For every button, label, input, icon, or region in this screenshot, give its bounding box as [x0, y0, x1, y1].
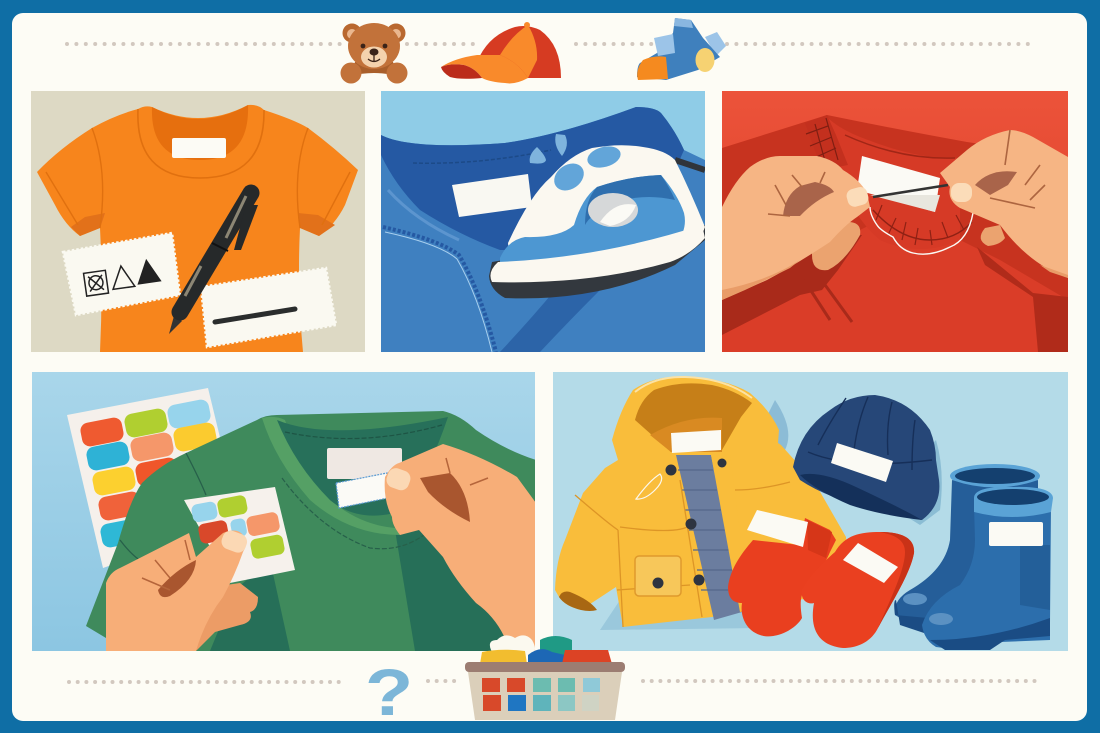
- panel: iron-on label: [381, 91, 705, 352]
- left hand: [722, 156, 870, 300]
- steam iron: [489, 143, 705, 298]
- orange t-shirt: [37, 105, 358, 352]
- yellow coat: [555, 377, 850, 630]
- icon: teddy bear: [340, 23, 408, 84]
- steam drops: [530, 134, 567, 164]
- right hand: [384, 444, 536, 651]
- hood label: [671, 430, 721, 453]
- blue jacket: [381, 107, 705, 352]
- left hand: [106, 528, 258, 651]
- panel: stick-on labels: [32, 372, 536, 651]
- panel: winter clothes with labels: [553, 372, 1068, 651]
- bottom dotted rule: [69, 681, 1036, 682]
- iron-on label: [452, 174, 532, 217]
- care tag with symbols: [63, 233, 180, 315]
- red mittens: [728, 510, 914, 648]
- icon: question mark: ?: [365, 656, 413, 729]
- red sweater: [722, 115, 1068, 352]
- small sticker sheet: [184, 487, 295, 583]
- navy beanie: [793, 395, 942, 525]
- needle: [873, 185, 948, 197]
- blue rain boots: [894, 464, 1053, 650]
- panel: sewing the label: [722, 91, 1068, 352]
- green sweater: [86, 411, 536, 651]
- panel: marker and woven tags: [31, 91, 365, 352]
- icon: socks: [637, 18, 726, 80]
- right hand: [940, 130, 1068, 278]
- thread: [869, 207, 974, 255]
- black marker pen: [169, 193, 258, 334]
- icon: cap: [441, 22, 561, 83]
- name tag: [201, 268, 336, 347]
- icon: laundry basket: [465, 635, 625, 720]
- sewn white label: [857, 156, 940, 212]
- neck label: [172, 138, 226, 158]
- neck labels: [327, 448, 402, 508]
- top dotted rule: [67, 42, 1036, 46]
- sticker sheet: [67, 388, 220, 568]
